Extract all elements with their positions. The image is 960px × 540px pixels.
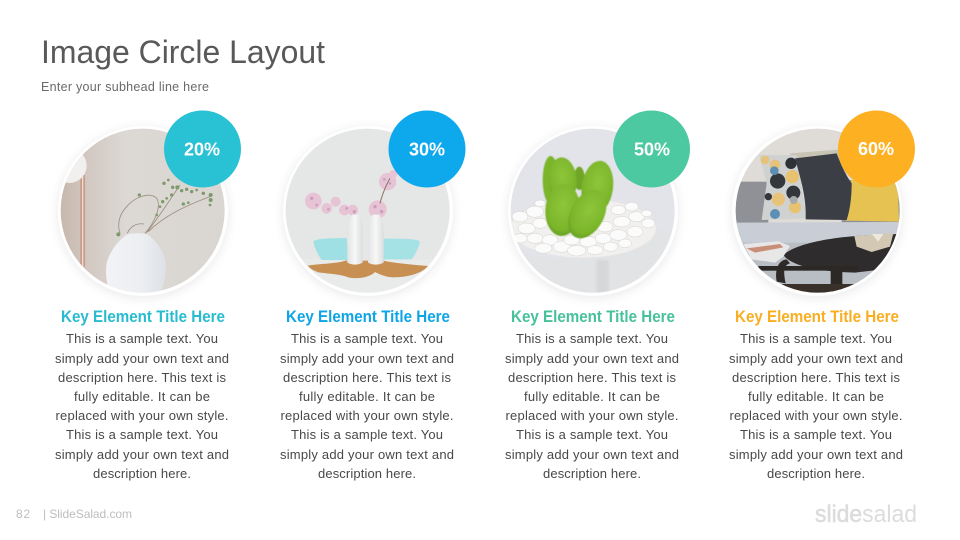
title: Image Circle Layout [41, 34, 325, 70]
body text: fully editable. It can be [524, 389, 660, 404]
body text: This is a sample text. You [291, 331, 443, 346]
element title: Key Element Title Here [61, 308, 225, 326]
body text: description here. This text is [283, 370, 452, 385]
panel: 50% element [505, 110, 690, 481]
body text: replaced with your own style. [506, 408, 678, 423]
body text: description here. This text is [508, 370, 676, 385]
badge: 50% [613, 110, 690, 188]
body text: This is a sample text. You [66, 331, 218, 346]
subhead: Enter your subhead line here [41, 80, 209, 94]
footer page number: 82 [16, 507, 30, 521]
body text: simply add your own text and [55, 447, 229, 462]
badge: 30%: 30% [409, 140, 445, 160]
photo circle: sofa and coffee table [732, 123, 905, 297]
body text: simply add your own text and [505, 351, 679, 366]
body text: description here. This text is [58, 370, 226, 385]
photo circle: cactus in white pebbles [507, 123, 680, 297]
body text: This is a sample text. You [66, 427, 218, 442]
body text: This is a sample text. You [516, 427, 668, 442]
body text: This is a sample text. You [291, 427, 443, 442]
body text: description here. [767, 466, 865, 481]
body text: fully editable. It can be [74, 389, 210, 404]
body text: replaced with your own style. [280, 408, 454, 423]
element title: Key Element Title Here [511, 308, 675, 326]
badge: 60% [838, 110, 915, 188]
body text: This is a sample text. You [740, 331, 892, 346]
element title: Key Element Title Here [286, 308, 450, 326]
panel: 30% element [280, 110, 466, 481]
body text [280, 331, 454, 481]
badge: 50%: 50% [634, 140, 670, 160]
body text [55, 331, 229, 481]
body text: replaced with your own style. [730, 408, 902, 423]
body text: description here. [543, 466, 641, 481]
body text: fully editable. It can be [748, 389, 884, 404]
body text: This is a sample text. You [516, 331, 668, 346]
body text: simply add your own text and [505, 447, 679, 462]
panel: 60% element [729, 110, 915, 481]
body text [505, 331, 679, 481]
body text: simply add your own text and [729, 351, 903, 366]
body text: description here. [318, 466, 416, 481]
body text: replaced with your own style. [56, 408, 228, 423]
panel: 20% element [52, 110, 241, 481]
badge: 30% [388, 110, 466, 188]
body text: simply add your own text and [729, 447, 903, 462]
body text: simply add your own text and [55, 351, 229, 366]
body text: fully editable. It can be [299, 389, 435, 404]
photo circle: vase with branches [52, 123, 230, 297]
body text: simply add your own text and [280, 447, 454, 462]
badge: 20% [164, 110, 241, 188]
badge: 60%: 60% [858, 139, 894, 159]
body text: description here. [93, 466, 191, 481]
body text: This is a sample text. You [740, 427, 892, 442]
body text: simply add your own text and [280, 351, 454, 366]
body text [729, 331, 903, 481]
body text: description here. This text is [732, 370, 900, 385]
badge: 20%: 20% [184, 140, 220, 160]
element title: Key Element Title Here [735, 308, 899, 326]
logo: slidesalad: slidesalad [815, 501, 917, 528]
footer source: | SlideSalad.com [43, 507, 132, 521]
photo circle: white vases with blossoms [282, 123, 455, 297]
